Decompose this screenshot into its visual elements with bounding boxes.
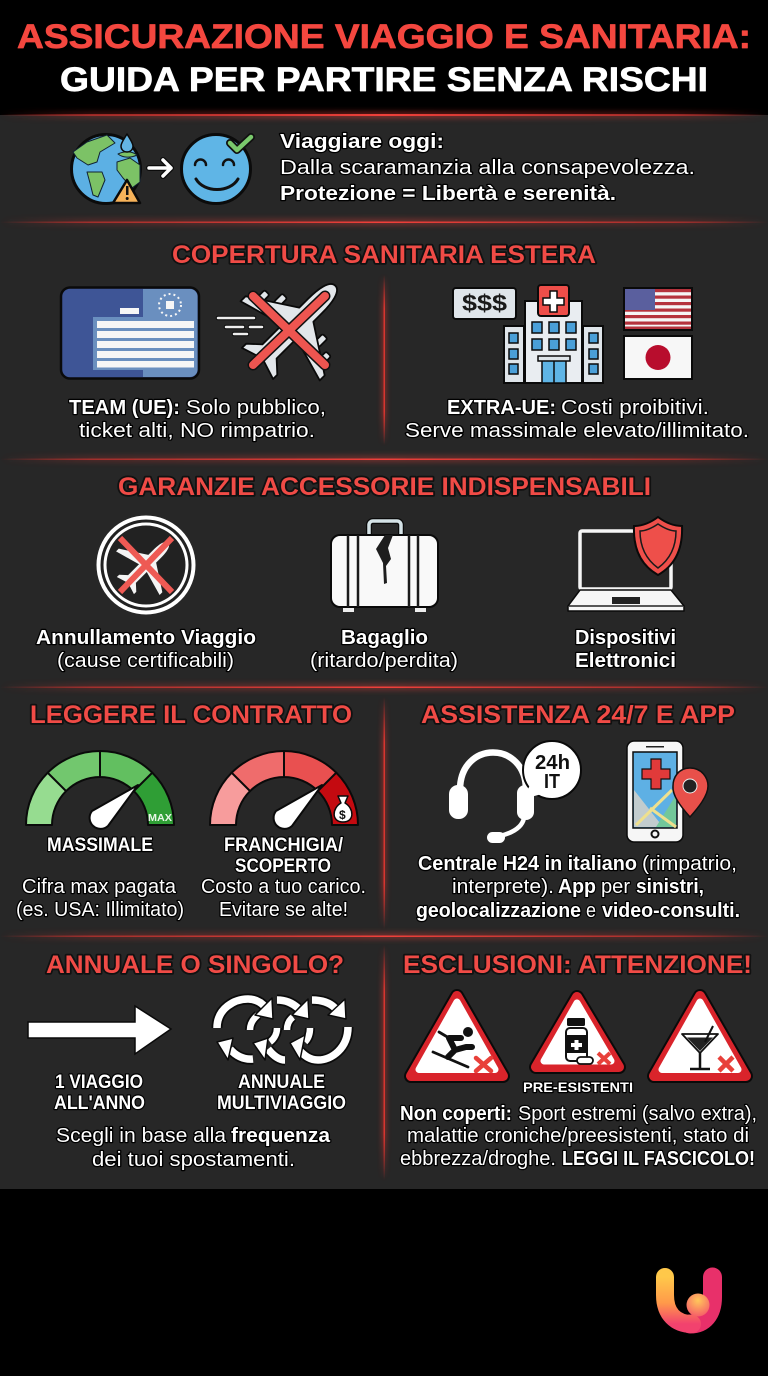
icon: hospital [504, 285, 603, 383]
text: exclusions description: malattie croniche/preesistenti, stato di [407, 1125, 749, 1147]
text: bagaglio: (ritardo/perdita) [310, 650, 458, 672]
text: assistenza description: per [601, 876, 630, 898]
icon: headset with bubble: IT [544, 771, 560, 793]
title: ASSICURAZIONE VIAGGIO E SANITARIA: [17, 18, 751, 56]
text: annullamento: (cause certificabili) [57, 650, 234, 672]
text: extra-UE: Serve massimale elevato/illimitato. [405, 420, 749, 442]
icon: headset with bubble [449, 741, 581, 843]
icon: smiling face with check [182, 134, 251, 204]
text: assistenza description: App [558, 876, 596, 898]
text: frequency advice: dei tuoi spostamenti. [92, 1149, 295, 1171]
label: pre-esistenti: PRE-ESISTENTI [523, 1079, 633, 1095]
chart: massimale gauge [26, 751, 174, 829]
icon: phone with map and pin [627, 741, 708, 842]
text: extra-UE: Costi proibitivi. [561, 397, 709, 419]
text: franchigia description [201, 876, 366, 921]
label: single trip [54, 1072, 145, 1114]
heading: ASSISTENZA 24/7 E APP [421, 701, 735, 729]
text: franchigia description: Costo a tuo carico. [201, 876, 366, 898]
icon: Japan flag [624, 336, 692, 379]
icon: TEAM card [61, 288, 199, 378]
text: assistenza description: geolocalizzazione [416, 900, 581, 922]
text: assistenza description: (rimpatrio, [642, 853, 737, 875]
panel: leggere il contratto [16, 701, 366, 921]
text: bagaglio: Bagaglio [341, 627, 428, 649]
label: massimale: MASSIMALE [47, 835, 153, 856]
icon: repeating arrows [217, 998, 348, 1060]
chart: massimale gauge: MAX [148, 813, 172, 824]
panel: assistenza [416, 701, 740, 922]
heading: COPERTURA SANITARIA ESTERA [172, 241, 596, 269]
intro text [280, 131, 695, 205]
icon: cost tag [453, 288, 516, 319]
text: exclusions description: Sport estremi (salvo extra), [518, 1103, 757, 1125]
text: TEAM: TEAM (UE): [69, 397, 180, 419]
icon: laptop with shield [568, 517, 684, 611]
text: exclusions description: Non coperti: [400, 1103, 512, 1125]
intro text: Dalla scaramanzia alla consapevolezza. [280, 157, 695, 179]
text: frequency advice: frequenza [231, 1125, 331, 1147]
icon: ski warning [411, 996, 503, 1076]
title [17, 18, 751, 99]
text: assistenza description: interprete). [452, 876, 554, 898]
text: assistenza description: sinistri, [636, 876, 704, 898]
text: assistenza description: video-consulti. [602, 900, 740, 922]
logo [665, 1277, 712, 1324]
text: massimale description: (es. USA: Illimitato) [16, 899, 184, 921]
heading: ANNUALE O SINGOLO? [46, 951, 344, 979]
text: dispositivi: Dispositivi [575, 627, 676, 649]
text: assistenza description [416, 853, 740, 922]
heading: ESCLUSIONI: ATTENZIONE! [403, 951, 752, 979]
label: single trip: 1 VIAGGIO [55, 1072, 143, 1093]
panel: esclusioni [400, 951, 757, 1170]
text: bagaglio [310, 627, 458, 672]
text: TEAM: ticket alti, NO rimpatrio. [79, 420, 315, 442]
text: TEAM [69, 397, 326, 442]
icon: crossed out plane [218, 246, 375, 403]
text: frequency advice [56, 1125, 331, 1171]
text: dispositivi [575, 627, 676, 672]
label: franchigia: FRANCHIGIA/ [224, 835, 344, 856]
text: annullamento: Annullamento Viaggio [36, 627, 256, 649]
label: single trip: ALL'ANNO [54, 1093, 145, 1114]
label: annual [217, 1072, 346, 1114]
icon: cost tag: $$$ [462, 290, 507, 316]
chart: franchigia gauge [210, 751, 358, 829]
label: annual: ANNUALE [238, 1072, 325, 1093]
panel: annuale o singolo [28, 951, 348, 1171]
chart: franchigia gauge: $ [339, 808, 346, 822]
text: annullamento [36, 627, 256, 672]
text: massimale description: Cifra max pagata [22, 876, 177, 898]
icon: trip cancellation [98, 518, 194, 612]
text: assistenza description: e [586, 900, 596, 922]
text: assistenza description: Centrale H24 in italiano [418, 853, 637, 875]
icon: single arrow [28, 1006, 171, 1054]
icon: medicine warning [536, 997, 619, 1067]
intro text: Viaggiare oggi: [280, 131, 444, 153]
icon: USA flag [624, 288, 692, 330]
icon: globe with warning [72, 134, 140, 204]
label: franchigia [224, 835, 344, 877]
panel: intro [72, 131, 695, 205]
title: GUIDA PER PARTIRE SENZA RISCHI [60, 61, 708, 99]
text: extra-UE: EXTRA-UE: [447, 397, 556, 419]
text: extra-UE [405, 397, 749, 442]
label: franchigia: SCOPERTO [235, 856, 331, 877]
icon: alcohol warning [654, 996, 746, 1076]
label: annual: MULTIVIAGGIO [217, 1093, 346, 1114]
heading: GARANZIE ACCESSORIE INDISPENSABILI [118, 473, 651, 501]
text: TEAM: Solo pubblico, [186, 397, 326, 419]
text: frequency advice: Scegli in base alla [56, 1125, 227, 1147]
text: exclusions description: ebbrezza/droghe. [400, 1148, 556, 1170]
panel: garanzie accessorie [36, 473, 684, 672]
text: exclusions description [400, 1103, 757, 1170]
text: massimale description [16, 876, 184, 921]
arrow [149, 160, 171, 176]
icon: headset with bubble: 24h [535, 752, 570, 774]
intro text: Protezione = Libertà e serenità. [280, 183, 616, 205]
text: franchigia description: Evitare se alte! [219, 899, 348, 921]
panel: copertura sanitaria estera [61, 241, 749, 442]
icon: broken suitcase [331, 521, 438, 612]
heading: LEGGERE IL CONTRATTO [30, 701, 352, 729]
text: dispositivi: Elettronici [575, 650, 676, 672]
